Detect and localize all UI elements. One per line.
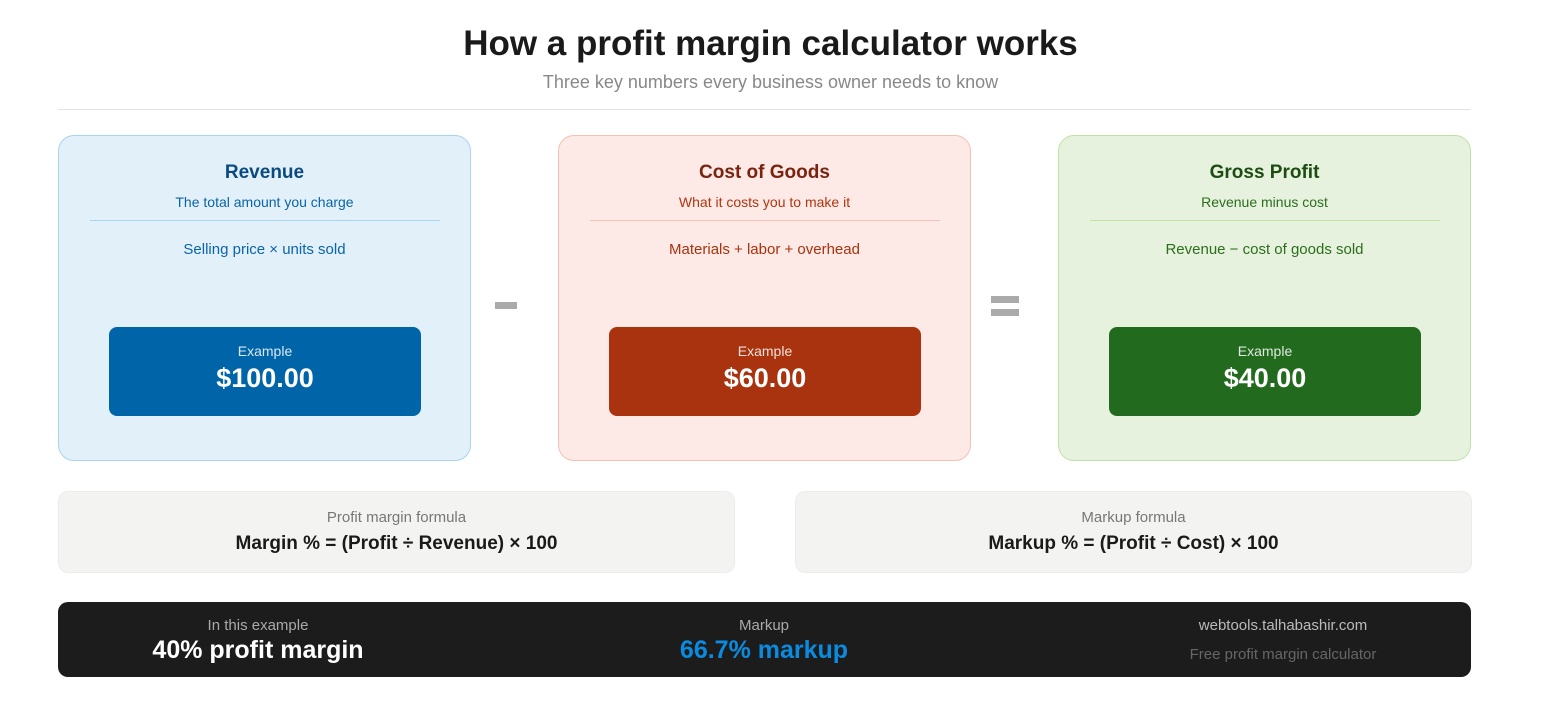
result: margin: 40% profit margin (152, 636, 364, 664)
panel: revenue: Selling price × units sold (183, 241, 346, 258)
panel: gross profit (1058, 135, 1471, 461)
credit: webtools.talhabashir.com (1199, 617, 1367, 634)
panel: cost of goods (558, 135, 971, 461)
panel: markup formula: Markup % = (Profit ÷ Cost) × 100 (988, 533, 1279, 554)
panel: margin formula (58, 491, 735, 573)
credit: Free profit margin calculator (1190, 646, 1376, 663)
result: margin: In this example (208, 617, 308, 634)
result: markup (680, 617, 848, 664)
panel: revenue (58, 135, 471, 461)
credit (1190, 617, 1376, 663)
icon: equals (991, 296, 1019, 316)
panel: revenue: Revenue (225, 162, 304, 183)
panel: cost of goods: Cost of Goods (699, 162, 830, 183)
panel: cost of goods: What it costs you to make it (679, 194, 850, 210)
result: markup: 66.7% markup (680, 636, 848, 664)
example: revenue: $100.00 (216, 363, 314, 393)
example: cost (609, 327, 921, 416)
panel: gross profit: Revenue − cost of goods sold (1165, 241, 1364, 258)
result: margin (152, 617, 364, 664)
panel: cost of goods: Materials + labor + overhead (669, 241, 860, 258)
result: markup: Markup (739, 617, 789, 634)
icon: minus (495, 302, 517, 309)
example: profit: Example (1238, 343, 1292, 359)
example: profit (1109, 327, 1421, 416)
panel: markup formula: Markup formula (1081, 509, 1186, 526)
panel: margin formula: Margin % = (Profit ÷ Revenue) × 100 (236, 533, 557, 554)
example: cost: Example (738, 343, 792, 359)
title: How a profit margin calculator works (463, 24, 1078, 63)
panel: gross profit: Gross Profit (1210, 162, 1319, 183)
panel: markup formula (795, 491, 1472, 573)
example: revenue (109, 327, 421, 416)
example: cost: $60.00 (724, 363, 806, 393)
example: profit: $40.00 (1224, 363, 1306, 393)
panel: margin formula: Profit margin formula (327, 509, 466, 526)
footer bar (58, 602, 1471, 677)
panel: gross profit: Revenue minus cost (1201, 194, 1328, 210)
example: revenue: Example (238, 343, 292, 359)
panel: revenue: The total amount you charge (175, 194, 354, 210)
subtitle: Three key numbers every business owner needs to know (543, 72, 998, 92)
